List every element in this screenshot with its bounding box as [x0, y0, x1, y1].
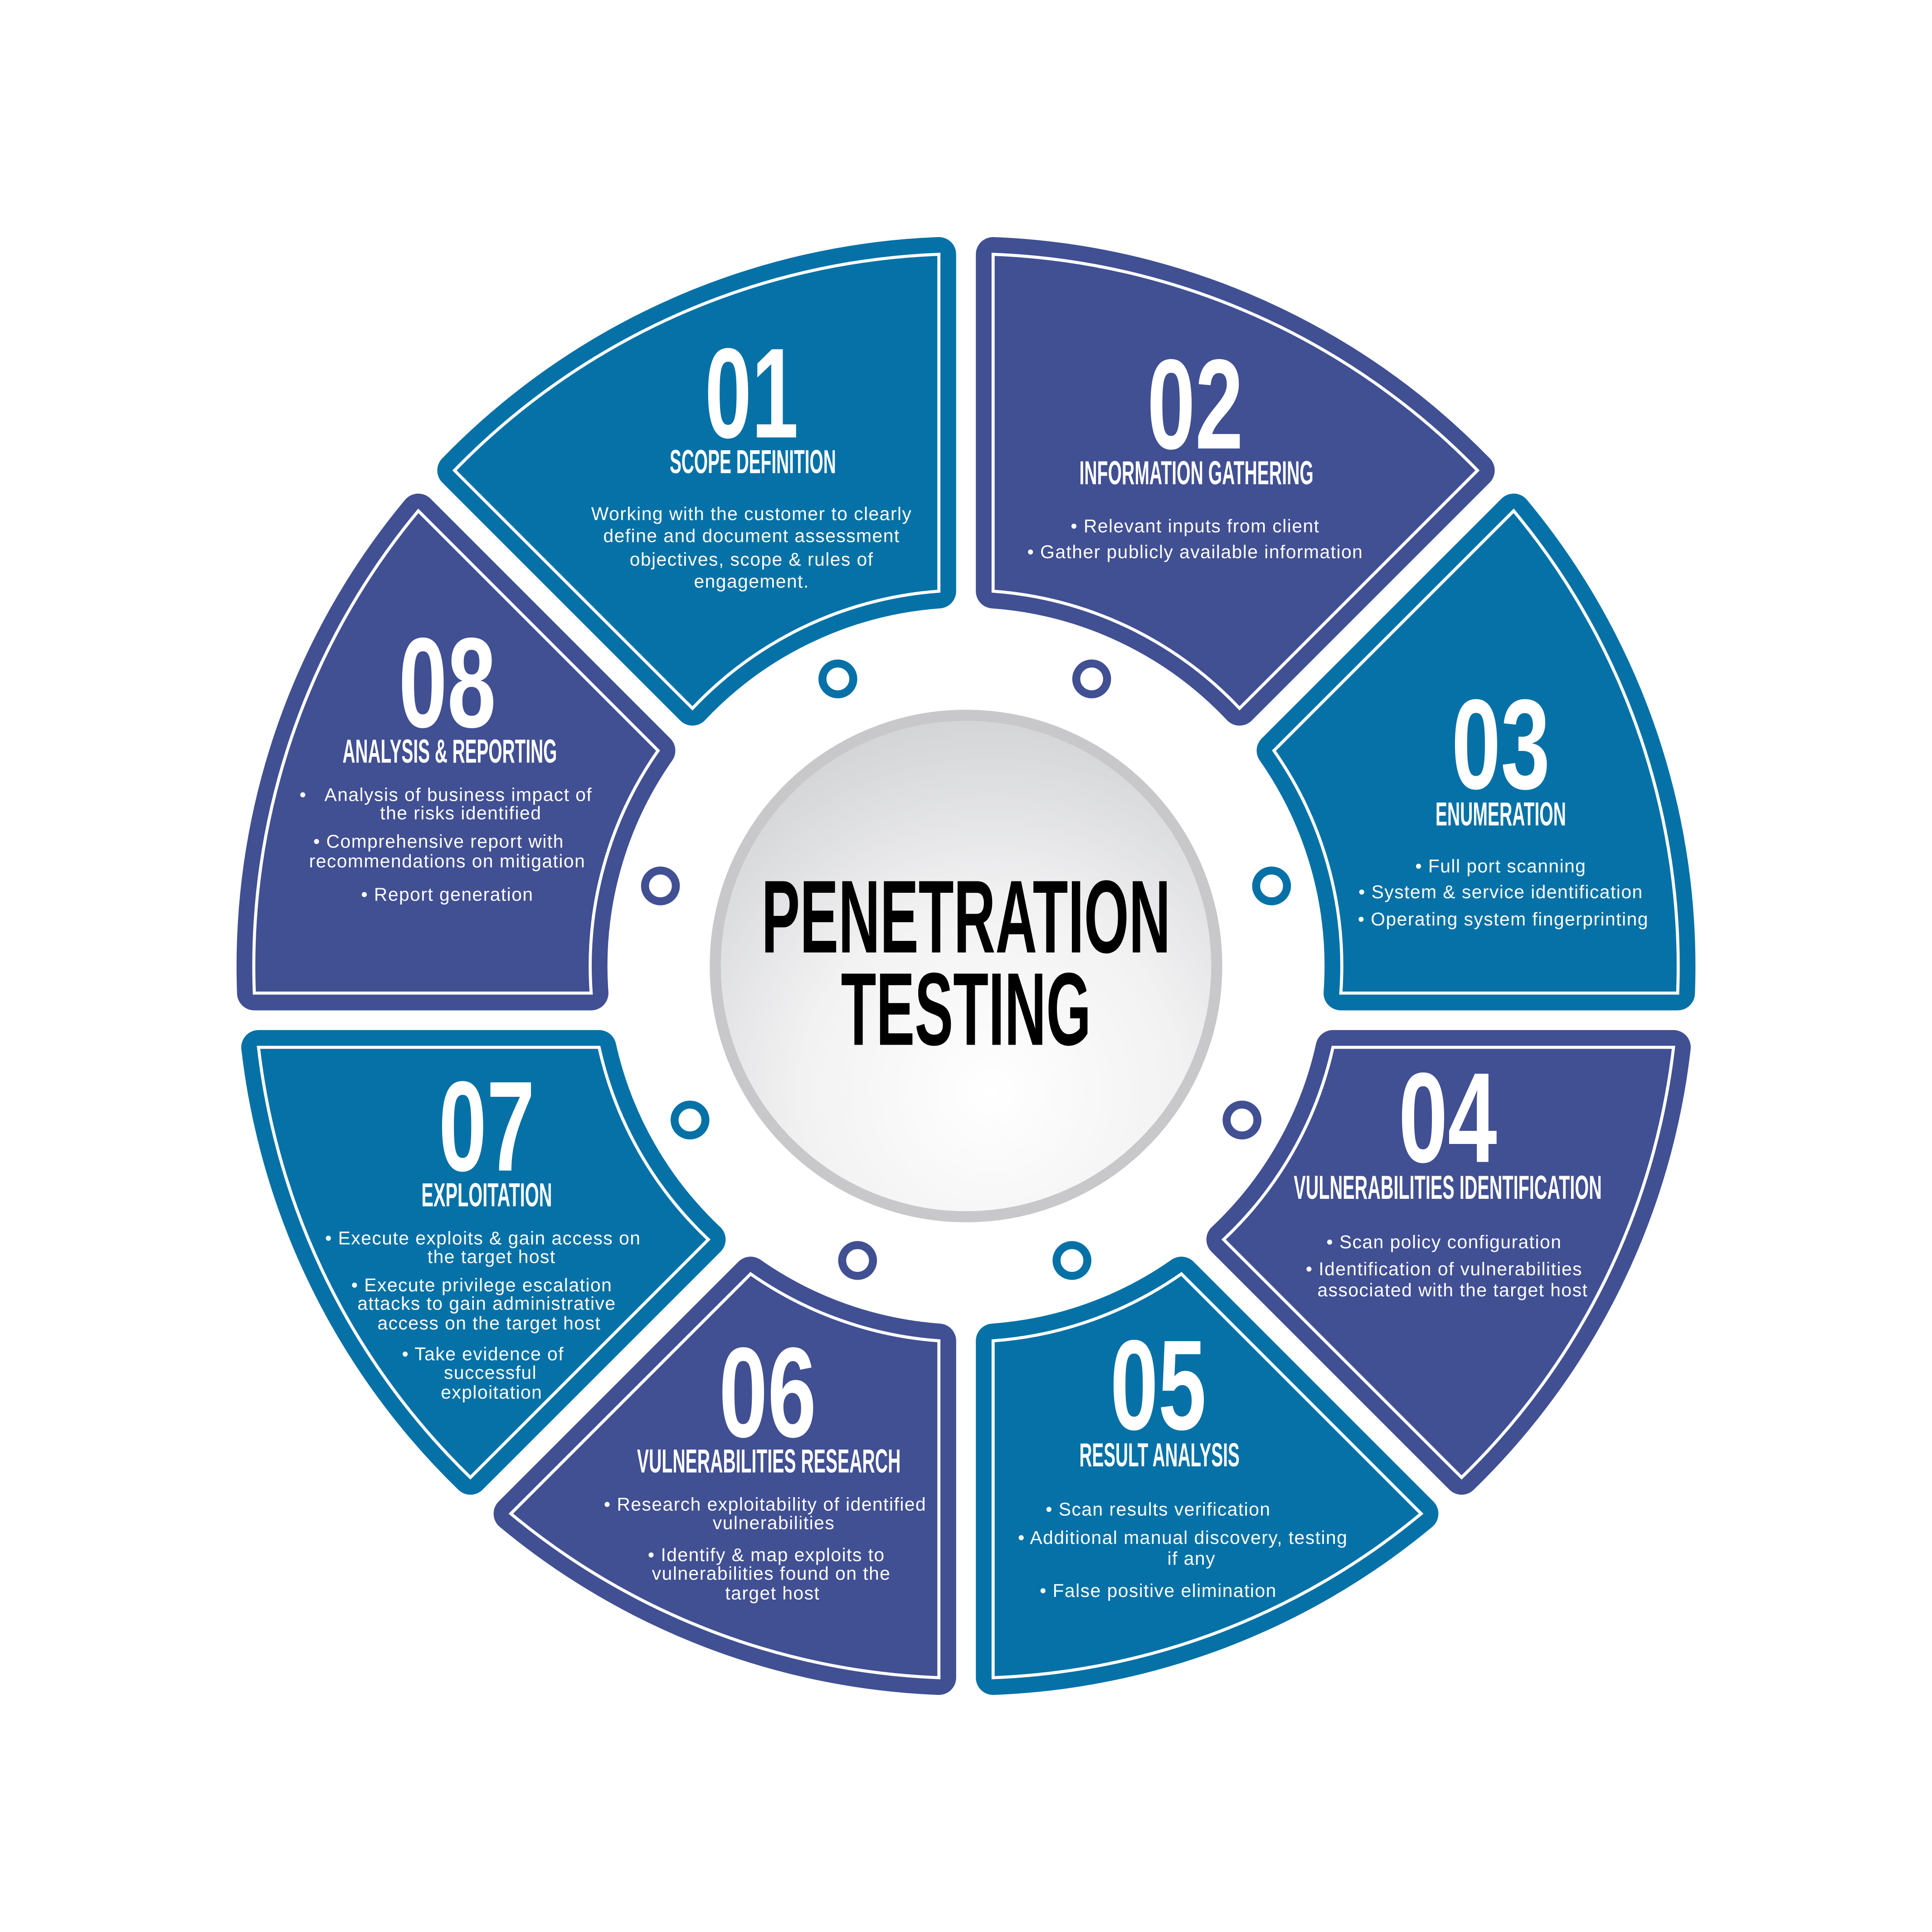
text: reporting bullets: the risks identified: [380, 803, 541, 823]
text: research bullets: • Research exploitability of identified: [604, 1494, 926, 1515]
text: reporting bullets: •: [300, 784, 307, 805]
text: exploitation bullets: • Execute privilege escalation: [351, 1275, 612, 1295]
heading: vulnerabilities identification: VULNERABILITIES IDENTIFICATION: [1294, 1169, 1602, 1206]
number 03: 03: [1451, 672, 1550, 816]
center circle: penetration testing: [715, 715, 1217, 1217]
text: exploitation bullets: successful: [444, 1362, 537, 1383]
number 05: 05: [1110, 1313, 1206, 1456]
number 07: 07: [438, 1055, 535, 1198]
title: penetration testing: PENETRATION: [761, 859, 1171, 975]
text: reporting bullets: Analysis of business impact of: [325, 784, 592, 805]
number 02: 02: [1147, 332, 1243, 476]
text: reporting bullets: recommendations on mitigation: [309, 851, 585, 871]
text: exploitation bullets: • Execute exploits & gain access on: [325, 1228, 641, 1249]
number 08: 08: [399, 611, 496, 754]
panel: 04 vulnerabilities identification: [1224, 1046, 1674, 1478]
text: info bullets: • Gather publicly available information: [1027, 541, 1363, 562]
heading: information gathering: INFORMATION GATHERING: [1080, 454, 1314, 492]
heading: scope definition: SCOPE DEFINITION: [670, 443, 836, 481]
text: result bullets: • Additional manual discovery, testing: [1018, 1527, 1348, 1548]
text: exploitation bullets: the target host: [428, 1246, 556, 1267]
heading: result analysis: RESULT ANALYSIS: [1080, 1436, 1240, 1474]
text: exploitation bullets: • Take evidence of: [402, 1343, 564, 1364]
text: reporting bullets: • Comprehensive report with: [313, 831, 564, 852]
text: enumeration bullets: • Full port scanning: [1415, 856, 1586, 876]
text: scope description: define and document assessment: [603, 526, 900, 546]
text: research bullets: • Identify & map exploits to: [648, 1544, 885, 1565]
number 01: 01: [705, 321, 798, 465]
text: exploitation bullets: access on the target host: [377, 1313, 601, 1333]
text: identification bullets: associated with the target host: [1318, 1280, 1588, 1300]
number 04: 04: [1398, 1046, 1498, 1189]
heading: vulnerabilities research: VULNERABILITIES RESEARCH: [637, 1442, 900, 1479]
panel: 02 information gathering: [993, 254, 1478, 708]
panel: 03 enumeration: [1274, 511, 1678, 993]
text: exploitation bullets: attacks to gain administrative: [357, 1293, 616, 1314]
panel: 01 scope definition: [454, 254, 939, 708]
text: result bullets: if any: [1168, 1548, 1216, 1569]
text: research bullets: vulnerabilities: [713, 1512, 835, 1533]
text: enumeration bullets: • System & service identification: [1358, 881, 1643, 902]
text: reporting bullets: • Report generation: [361, 884, 534, 905]
text: identification bullets: • Scan policy configuration: [1326, 1231, 1562, 1252]
center circle: penetration testing: TESTING: [841, 951, 1091, 1067]
text: result bullets: • False positive elimination: [1040, 1580, 1277, 1601]
panel: 07 exploitation: [258, 1047, 708, 1478]
text: info bullets: • Relevant inputs from client: [1071, 516, 1320, 536]
text: exploitation bullets: exploitation: [441, 1382, 542, 1402]
text: identification bullets: • Identification of vulnerabilities: [1306, 1259, 1582, 1280]
text: research bullets: target host: [725, 1582, 820, 1603]
heading: analysis & reporting: ANALYSIS & REPORTING: [342, 733, 557, 770]
text: scope description: objectives, scope & rules of: [630, 549, 874, 569]
panel: 08 analysis & reporting: [254, 511, 658, 993]
heading: enumeration: ENUMERATION: [1436, 796, 1566, 833]
text: scope description: engagement.: [694, 571, 809, 592]
text: research bullets: vulnerabilities found on the: [652, 1563, 891, 1584]
panel: 05 result analysis: [993, 1274, 1421, 1678]
text: scope description: Working with the customer to clearly: [591, 503, 912, 524]
connector rings: [645, 663, 1287, 1276]
panel: 06 vulnerabilities research: [511, 1274, 939, 1678]
heading: exploitation: EXPLOITATION: [421, 1176, 552, 1213]
text: result bullets: • Scan results verification: [1046, 1499, 1271, 1519]
text: enumeration bullets: • Operating system fingerprinting: [1358, 909, 1649, 930]
number 06: 06: [719, 1321, 816, 1464]
